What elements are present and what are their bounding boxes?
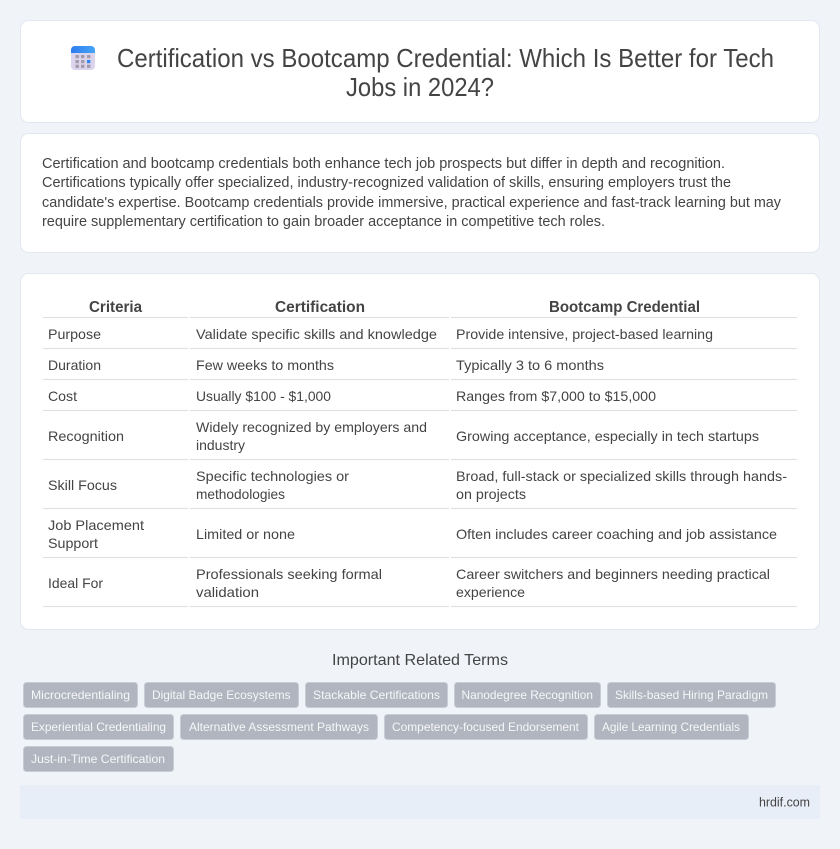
icon: calendar: [71, 46, 95, 70]
panel: summary text: Certifications typically offer specialized, industry-recognized validation of skills, ensuring employers trust the: [42, 175, 731, 191]
row: ideal for: experience: [456, 584, 525, 600]
panel: related term tags: Just-in-Time Certification: [31, 752, 165, 766]
row: ideal for: Professionals seeking formal: [196, 566, 382, 582]
title: Jobs in 2024?: [346, 74, 494, 102]
panel: summary text: Certification and bootcamp credentials both enhance tech job prospects but differ in depth and recognition.: [42, 156, 725, 172]
row: skill focus: Broad, full-stack or specialized skills through hands-: [456, 468, 787, 484]
row: duration: Few weeks to months: [196, 357, 334, 373]
row: job placement support: Job Placement: [48, 517, 144, 533]
panel: header: [20, 20, 820, 122]
row: recognition: industry: [196, 437, 245, 453]
row: recognition: [48, 419, 759, 453]
row: recognition: Widely recognized by employers and: [196, 419, 427, 435]
panel: related term tags: Experiential Credentialing: [31, 720, 166, 734]
row: ideal for: Ideal For: [48, 575, 103, 591]
panel: related term tags: Skills-based Hiring Paradigm: [615, 688, 768, 702]
row: recognition: Recognition: [48, 428, 124, 444]
row: skill focus: Skill Focus: [48, 477, 117, 493]
panel: related term tags: Stackable Certifications: [313, 688, 440, 702]
row: duration: Duration: [48, 357, 101, 373]
row: job placement support: [48, 517, 777, 551]
table header: Certification: [275, 299, 365, 316]
table header: [89, 299, 700, 316]
row: cost: Usually $100 - $1,000: [196, 388, 331, 404]
row: cost: Cost: [48, 388, 77, 404]
title: [117, 45, 774, 102]
row: cost: Ranges from $7,000 to $15,000: [456, 388, 656, 404]
row: duration: Typically 3 to 6 months: [456, 357, 604, 373]
table header: Criteria: [89, 299, 142, 316]
row: purpose: [48, 326, 713, 342]
row: purpose: Validate specific skills and knowledge: [196, 326, 437, 342]
row: job placement support: Limited or none: [196, 526, 295, 542]
footer: [20, 785, 820, 819]
panel: summary text: [20, 134, 820, 252]
panel: related term tags: Digital Badge Ecosystems: [152, 688, 290, 702]
row: ideal for: validation: [196, 584, 259, 600]
row: ideal for: Career switchers and beginners needing practical: [456, 566, 770, 582]
row: recognition: Growing acceptance, especially in tech startups: [456, 428, 759, 444]
row: skill focus: methodologies: [196, 486, 285, 502]
table header: Bootcamp Credential: [549, 299, 700, 316]
heading: related terms: Important Related Terms: [332, 652, 508, 669]
panel: related term tags: Agile Learning Credentials: [602, 720, 740, 734]
panel: related term tags: Microcredentialing: [31, 688, 130, 702]
panel: related term tags: Alternative Assessment Pathways: [189, 720, 369, 734]
panel: related term tags: [24, 682, 776, 772]
row: duration: [48, 357, 604, 373]
row: purpose: Purpose: [48, 326, 101, 342]
panel: summary text: require supplementary certification to gain broader acceptance in competitive tech roles.: [42, 214, 605, 230]
panel: related term tags: Nanodegree Recognition: [462, 688, 593, 702]
row: ideal for: [48, 566, 770, 600]
row: skill focus: on projects: [456, 486, 526, 502]
row: skill focus: Specific technologies or: [196, 468, 349, 484]
footer: hrdif.com: [759, 794, 810, 810]
row: skill focus: [48, 468, 787, 502]
panel: summary text: candidate's expertise. Bootcamp credentials provide immersive, practical experience and fast-track learning but may: [42, 195, 782, 211]
panel: related term tags: Competency-focused Endorsement: [392, 720, 580, 734]
row: cost: [48, 388, 656, 404]
row: purpose: Provide intensive, project-based learning: [456, 326, 713, 342]
title: Certification vs Bootcamp Credential: Which Is Better for Tech: [117, 45, 774, 73]
row: job placement support: Support: [48, 535, 98, 551]
row: job placement support: Often includes career coaching and job assistance: [456, 526, 777, 542]
panel: comparison table: [20, 274, 820, 630]
